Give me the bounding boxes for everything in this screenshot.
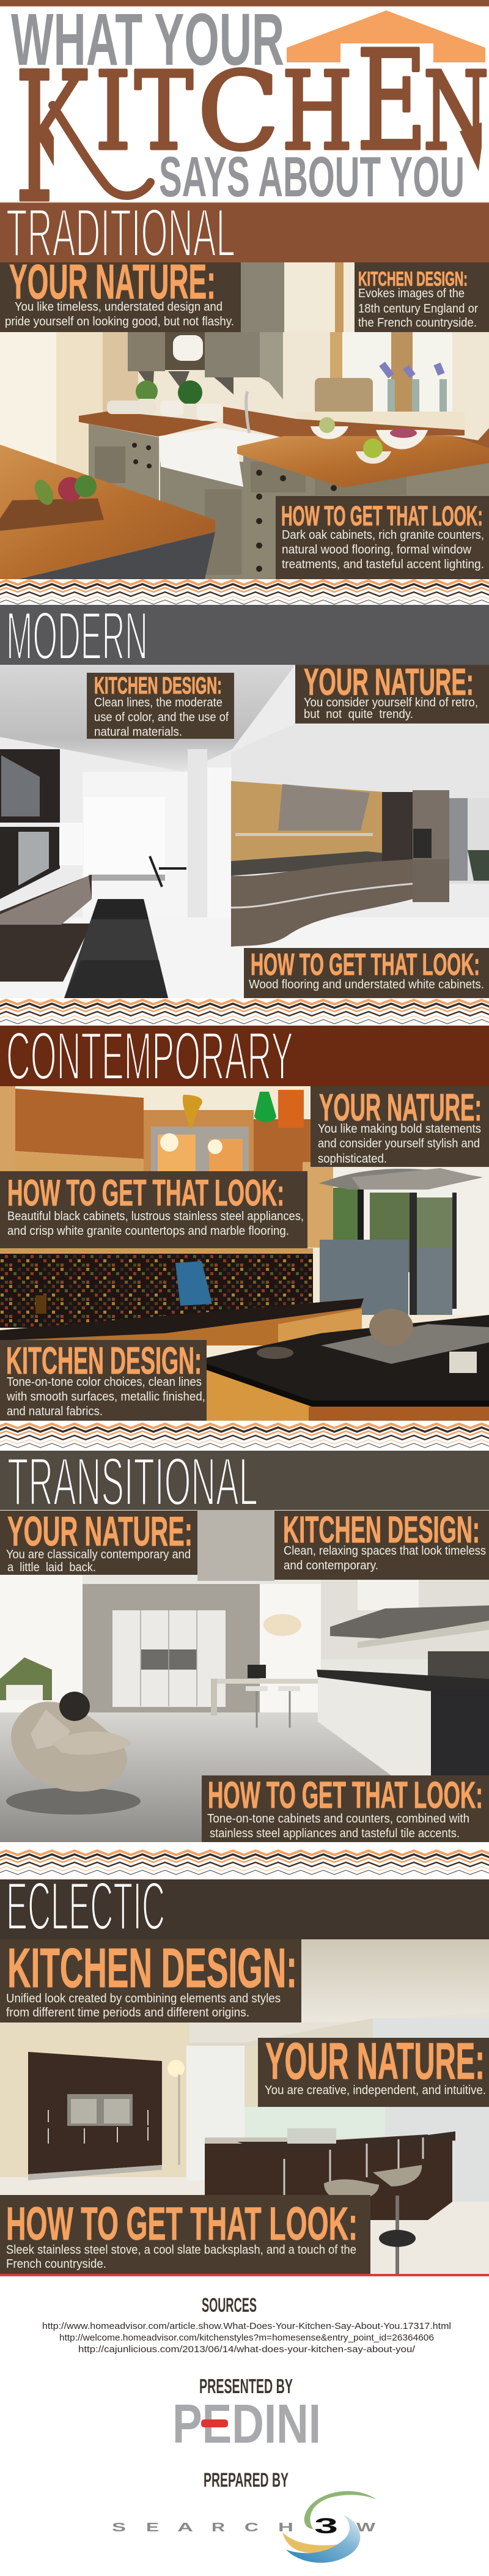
callout: kitchen design xyxy=(355,262,489,332)
logo: search 3 w: A xyxy=(177,2521,193,2534)
title word: kitchen: K xyxy=(15,34,91,242)
text: design description: the French countryside. xyxy=(358,316,477,330)
text: design description xyxy=(284,1544,486,1572)
callout: kitchen design xyxy=(0,1340,207,1421)
heading: kitchen design: KITCHEN DESIGN: xyxy=(6,1340,202,1382)
text: look description: stainless steel appliances and tasteful tile accents. xyxy=(210,1827,460,1840)
text: design description: Clean lines, the moderate xyxy=(94,696,222,709)
text: look description: French countryside. xyxy=(6,2257,106,2271)
heading: sources: SOURCES xyxy=(202,2294,257,2316)
heading: kitchen design: KITCHEN DESIGN: xyxy=(7,1938,297,1999)
heading: how to get that look: HOW TO GET THAT LOOK: xyxy=(7,1172,284,1213)
logo: search 3 w xyxy=(112,2491,377,2563)
logo: search 3 w: C xyxy=(244,2521,259,2534)
zigzag divider xyxy=(0,1842,489,1879)
section heading band: eclectic: ECLECTIC xyxy=(6,1868,165,1944)
text: look description xyxy=(6,2243,356,2271)
text: nature description: a little laid back. xyxy=(7,1561,96,1574)
text: design description: from different time periods and different origins. xyxy=(6,2006,249,2019)
text: look description xyxy=(207,1812,469,1840)
callout: how to get that look xyxy=(276,496,489,579)
heading: your nature: YOUR NATURE: xyxy=(7,1508,193,1555)
text: nature description: sophisticated. xyxy=(318,1152,387,1166)
section heading band: modern xyxy=(0,598,489,674)
zigzag divider xyxy=(0,998,489,1026)
logo: search 3 w: R xyxy=(211,2521,226,2534)
text: design description: use of color, and the use of xyxy=(94,711,229,724)
text: design description xyxy=(94,696,229,739)
callout: your nature xyxy=(0,1508,197,1575)
text: design description: Tone-on-tone color choices, clean lines xyxy=(7,1375,202,1389)
section heading band: traditional: TRADITIONAL xyxy=(6,195,235,271)
text: nature description xyxy=(5,300,234,328)
title word: kitchen: I xyxy=(95,49,131,174)
text: look description xyxy=(282,528,484,571)
logo: pedini: PEDINI xyxy=(172,2394,321,2455)
text: design description: natural materials. xyxy=(94,725,182,739)
text: design description: and natural fabrics. xyxy=(7,1405,103,1418)
text: source links: http://www.homeadvisor.com/article.show.What-Does-Your-Kitchen-Say-About-You.17317.html xyxy=(42,2322,451,2331)
callout: kitchen design xyxy=(87,673,234,739)
text: design description xyxy=(6,1992,281,2019)
text: look description: natural wood flooring, formal window xyxy=(282,543,472,557)
heading: kitchen design: KITCHEN DESIGN: xyxy=(94,673,222,699)
logo: search 3 w: S xyxy=(112,2521,126,2534)
text: design description: Evokes images of the xyxy=(358,287,465,300)
footer: prepared by xyxy=(112,2469,377,2563)
heading: prepared by: PREPARED BY xyxy=(204,2469,289,2491)
title xyxy=(11,10,487,202)
heading: your nature: YOUR NATURE: xyxy=(9,254,216,309)
callout: your nature xyxy=(258,2032,489,2107)
heading: presented by: PRESENTED BY xyxy=(199,2375,293,2397)
red divider line xyxy=(0,2274,489,2276)
panel: modern kitchen xyxy=(0,661,489,998)
callout: your nature xyxy=(311,1086,489,1167)
callout: how to get that look xyxy=(0,2195,370,2274)
text: design description: Unified look created by combining elements and styles xyxy=(6,1992,281,2005)
text: look description: treatments, and tasteful accent lighting. xyxy=(282,558,484,571)
section heading band: modern: MODERN xyxy=(6,598,148,674)
icon: orange roof xyxy=(287,10,485,62)
header background band xyxy=(0,0,489,7)
logo: search 3 w: H xyxy=(278,2521,293,2534)
title word: kitchen: C xyxy=(197,49,279,174)
callout: kitchen design xyxy=(0,1938,301,2023)
text: design description xyxy=(6,1375,205,1418)
panel: traditional kitchen xyxy=(0,254,489,579)
text: look description: Sleek stainless steel stove, a cool slate backsplash, and a touch of the xyxy=(6,2243,356,2257)
photo: modern kitchen xyxy=(0,665,489,998)
panel: transitional kitchen xyxy=(0,1508,489,1842)
text: nature description xyxy=(304,696,478,721)
text: design description: 18th century England or xyxy=(358,302,478,316)
text: design description: and contemporary. xyxy=(284,1559,378,1572)
logo: search 3 w: W xyxy=(356,2521,375,2534)
callout: kitchen design xyxy=(274,1509,489,1580)
panel: contemporary kitchen xyxy=(0,1086,489,1421)
text: nature description: but not quite trendy. xyxy=(304,708,413,721)
callout: how to get that look xyxy=(244,947,489,998)
text: look description: Beautiful black cabinets, lustrous stainless steel appliances, xyxy=(7,1210,304,1223)
logo: search 3 w: E xyxy=(146,2521,159,2534)
text: look description: Tone-on-tone cabinets and counters, combined with xyxy=(207,1812,469,1826)
footer: sources xyxy=(42,2294,451,2355)
zigzag divider xyxy=(0,579,489,605)
logo: search 3 w: 3 xyxy=(314,2514,338,2538)
section heading band: eclectic xyxy=(0,1868,489,1944)
text: look description xyxy=(7,1210,304,1238)
title line: what your: WHAT YOUR xyxy=(11,0,284,81)
photo: traditional kitchen xyxy=(0,262,489,579)
footer: presented by xyxy=(172,2375,321,2455)
callout: your nature xyxy=(0,254,241,332)
callout: how to get that look xyxy=(202,1774,489,1842)
zigzag divider xyxy=(0,1421,489,1451)
text: nature description: You like making bold statements xyxy=(318,1122,481,1136)
text: nature description xyxy=(318,1122,481,1166)
photo: contemporary kitchen xyxy=(0,1086,489,1421)
section heading band: transitional: TRANSITIONAL xyxy=(7,1444,258,1520)
text: design description: with smooth surfaces, metallic finished, xyxy=(6,1390,205,1404)
photo: transitional kitchen xyxy=(0,1510,489,1842)
photo: eclectic kitchen xyxy=(0,1939,489,2274)
text: source links: http://cajunlicious.com/2013/06/14/what-does-your-kitchen-say-about-you/ xyxy=(78,2345,416,2355)
text: source links: http://welcome.homeadvisor.com/kitchenstyles?m=homesense&entry_point_id=26364606 xyxy=(59,2333,434,2343)
title word: kitchen: E xyxy=(356,21,427,182)
text: design description xyxy=(358,287,478,330)
text: nature description: pride yourself on looking good, but not flashy. xyxy=(5,315,234,328)
text: nature description xyxy=(6,1548,191,1574)
text: nature description: You are classically contemporary and xyxy=(6,1548,191,1561)
text: nature description: You like timeless, understated design and xyxy=(15,300,222,314)
callout: your nature xyxy=(295,661,489,724)
text: source links xyxy=(42,2322,451,2355)
text: nature description: You consider yourself kind of retro, xyxy=(304,696,478,709)
title word: kitchen xyxy=(20,46,487,202)
callout: how to get that look xyxy=(0,1171,307,1248)
text: look description: and crisp white granite countertops and marble flooring. xyxy=(7,1224,289,1238)
panel: eclectic kitchen xyxy=(0,1938,489,2274)
title word: kitchen: T xyxy=(134,49,193,174)
title word: kitchen: H xyxy=(282,49,353,174)
